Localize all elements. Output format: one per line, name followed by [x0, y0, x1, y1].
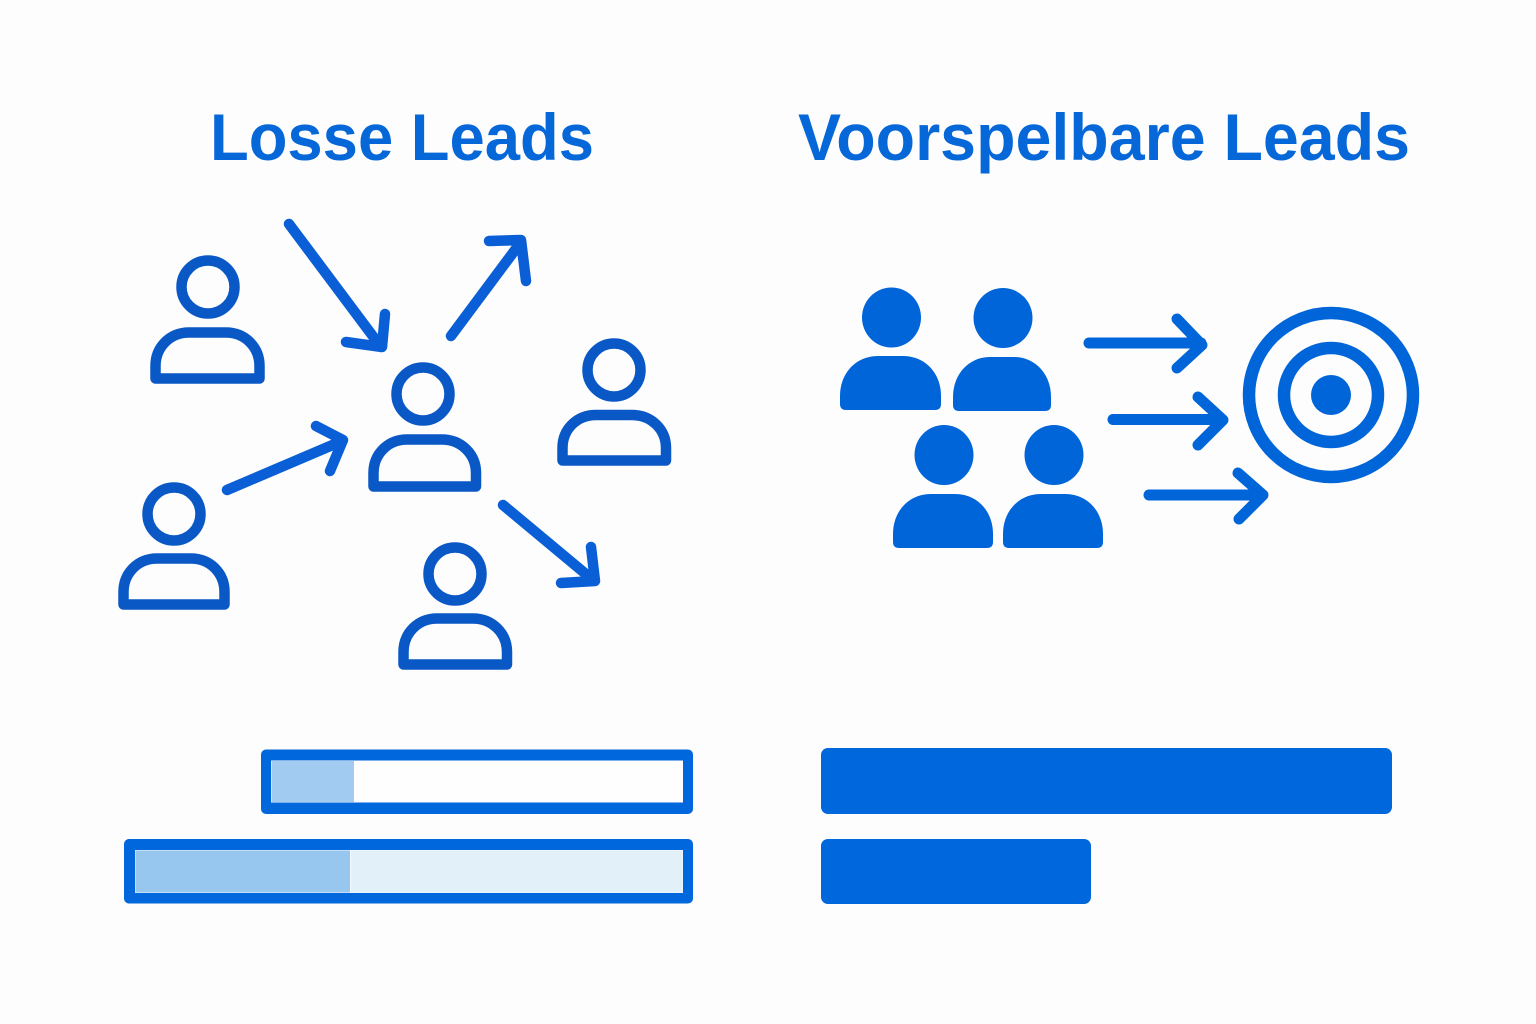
bar: predictable leads top: [821, 748, 1392, 814]
arrow: lower left into center: [227, 426, 343, 490]
bar: loose leads top: [261, 750, 693, 814]
icon: person bottom: [404, 548, 507, 664]
title: Voorspelbare Leads: Voorspelbare Leads: [798, 100, 1410, 174]
icon: person center: [374, 368, 476, 486]
icon: filled person 1: [840, 288, 941, 410]
bar: predictable leads bottom: [821, 839, 1091, 904]
icon: filled person 4: [1003, 425, 1103, 548]
title: Losse Leads: Losse Leads: [210, 100, 594, 174]
icon: target: [1249, 313, 1413, 477]
arrow: middle to target: [1113, 397, 1223, 445]
arrow: center to lower right: [503, 505, 595, 583]
arrow: top to target: [1089, 319, 1202, 368]
panel: scattered people and arrows: [124, 224, 666, 664]
bar: loose leads bottom: [124, 839, 693, 904]
panel: grouped people, arrows and target: [840, 288, 1413, 548]
icon: person top left: [156, 260, 260, 378]
icon: filled person 2: [953, 288, 1051, 411]
arrow: bottom to target: [1149, 473, 1263, 519]
arrow: top left into center: [289, 224, 385, 347]
icon: filled person 3: [893, 425, 993, 548]
arrow: center to top right: [451, 240, 526, 336]
icon: person right: [562, 344, 666, 460]
icon: person lower left: [124, 488, 224, 604]
